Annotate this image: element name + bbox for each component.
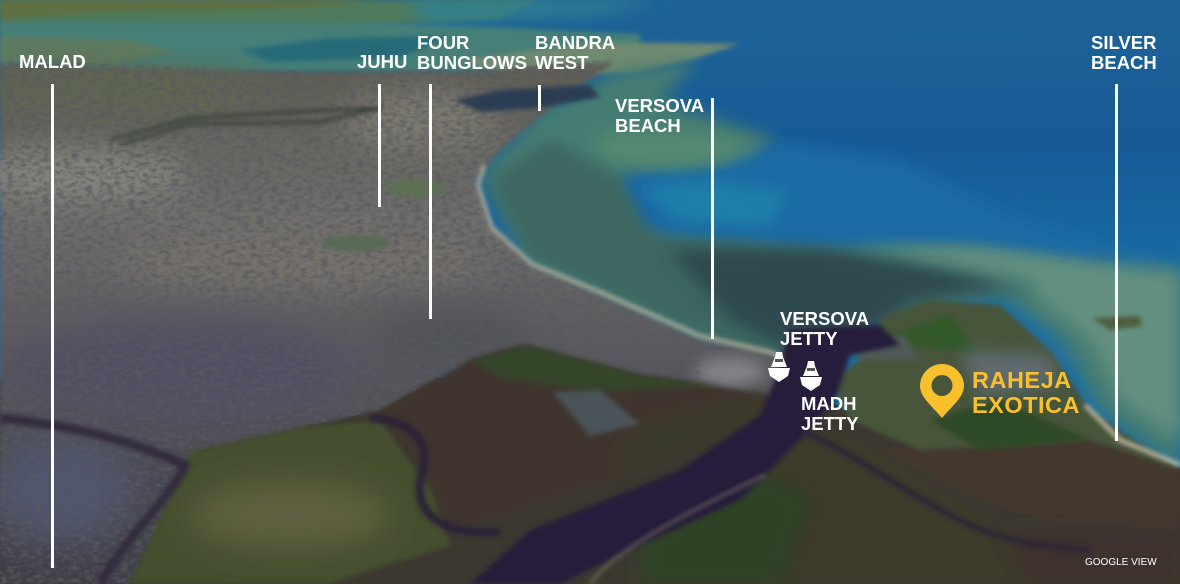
- icon: Madh Jetty boat: [800, 361, 822, 391]
- label: Bandra West: BANDRA: [535, 32, 615, 53]
- far sea and coast: [0, 0, 740, 78]
- central mangrove: [380, 345, 770, 530]
- label: Four Bunglows: [417, 32, 527, 72]
- urban grain: [0, 60, 700, 584]
- beach: [478, 165, 800, 366]
- label: Madh Jetty: MADH: [801, 393, 856, 414]
- leader line: Bandra West: [538, 85, 541, 111]
- icon: location pin: [920, 364, 964, 418]
- shoal in bay: [590, 130, 772, 176]
- label: Malad: MALAD: [19, 51, 86, 72]
- label: Juhu: JUHU: [357, 51, 407, 72]
- label: Versova Beach: VERSOVA: [615, 95, 704, 116]
- lower land base: [0, 375, 1180, 584]
- inlet: [855, 335, 920, 360]
- lower left marsh: [130, 420, 450, 584]
- label: Versova Jetty: [780, 308, 869, 348]
- lower right land: [620, 430, 1180, 584]
- turquoise patch: [625, 142, 1180, 268]
- label: Silver Beach: BEACH: [1091, 52, 1157, 72]
- label: Raheja Exotica: [972, 367, 1080, 418]
- label: Bandra West: [535, 32, 615, 72]
- leader line: Malad: [51, 84, 54, 568]
- caption: Google View: GOOGLE VIEW: [1085, 557, 1157, 568]
- label: Silver Beach: [1091, 32, 1157, 72]
- leader line: Silver Beach: [1115, 84, 1118, 441]
- leader line: Four Bunglows: [429, 84, 432, 319]
- right peninsula: [830, 300, 1180, 470]
- city land: [0, 62, 790, 584]
- left creek: [0, 418, 185, 584]
- label: Silver Beach: SILVER: [1091, 32, 1156, 53]
- label: Versova Jetty: JETTY: [780, 328, 838, 348]
- label: Madh Jetty: JETTY: [801, 412, 859, 434]
- label: Bandra West: WEST: [535, 52, 588, 72]
- label: Versova Jetty: VERSOVA: [780, 308, 869, 329]
- label: Raheja Exotica: RAHEJA: [972, 367, 1072, 393]
- winding rivers: [370, 418, 500, 532]
- creek and lake in north: [110, 85, 600, 251]
- land textures: [0, 68, 766, 540]
- dark turbid water: [490, 140, 1030, 360]
- icon: Versova Jetty boat: [768, 352, 790, 382]
- island: [1092, 316, 1142, 330]
- label: Versova Beach: BEACH: [615, 114, 681, 136]
- leader line: Juhu: [378, 84, 381, 207]
- sewage ponds: [553, 390, 640, 436]
- leader line: Versova Beach: [711, 98, 714, 339]
- shallow water: [480, 60, 1180, 470]
- label: Four Bunglows: FOUR: [417, 32, 469, 53]
- coastal right shallows: [850, 240, 1180, 440]
- label: Four Bunglows: BUNGLOWS: [417, 52, 527, 72]
- label: Raheja Exotica: EXOTICA: [972, 392, 1080, 418]
- label: Versova Beach: [615, 95, 704, 136]
- label: Madh Jetty: [801, 393, 859, 434]
- right beach: [1085, 405, 1180, 465]
